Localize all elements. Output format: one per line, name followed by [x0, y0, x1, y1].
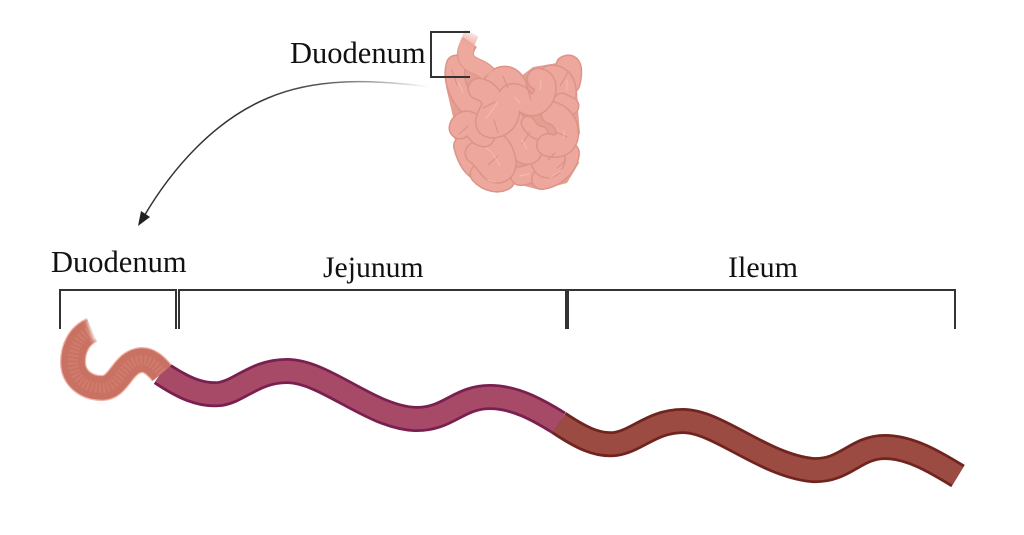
intestine illustration [446, 33, 580, 193]
loop: upper right [550, 76, 565, 98]
segment: duodenum tube [73, 314, 162, 388]
small duodenum bracket [431, 32, 470, 77]
top label: Duodenum: Duodenum [290, 36, 426, 70]
loop: bottom right [542, 153, 569, 179]
loop: small middle [528, 123, 541, 133]
loop: left round [460, 122, 484, 136]
duodenum segment of intestine [465, 33, 488, 74]
section label: Duodenum: Duodenum [51, 245, 187, 279]
loop: upper left [493, 77, 516, 87]
section label: Ileum: Ileum [728, 251, 798, 284]
curved arrow [138, 82, 430, 226]
intestine silhouette [446, 54, 580, 193]
bracket: ileum [568, 290, 955, 329]
loop: lower serpentine [476, 141, 505, 172]
segment: jejunum [161, 371, 559, 423]
intestine fold shading [452, 70, 568, 182]
loop: bottom [480, 174, 505, 182]
loop: bottom left [464, 146, 482, 172]
loop: middle serpentine [508, 122, 532, 154]
loop: lower centre [539, 152, 555, 168]
loop: right small [562, 102, 570, 106]
bracket: jejunum [179, 290, 566, 329]
loop: central serpentine [479, 79, 545, 127]
loop: top right [565, 64, 573, 84]
loop: bottom middle [520, 170, 536, 176]
faded start of duodenum [87, 314, 109, 342]
section label: Jejunum: Jejunum [323, 252, 424, 284]
bracket: duodenum [60, 290, 176, 329]
loop: left column [455, 65, 474, 108]
loop: right [548, 113, 567, 146]
segment: ileum [559, 421, 958, 476]
